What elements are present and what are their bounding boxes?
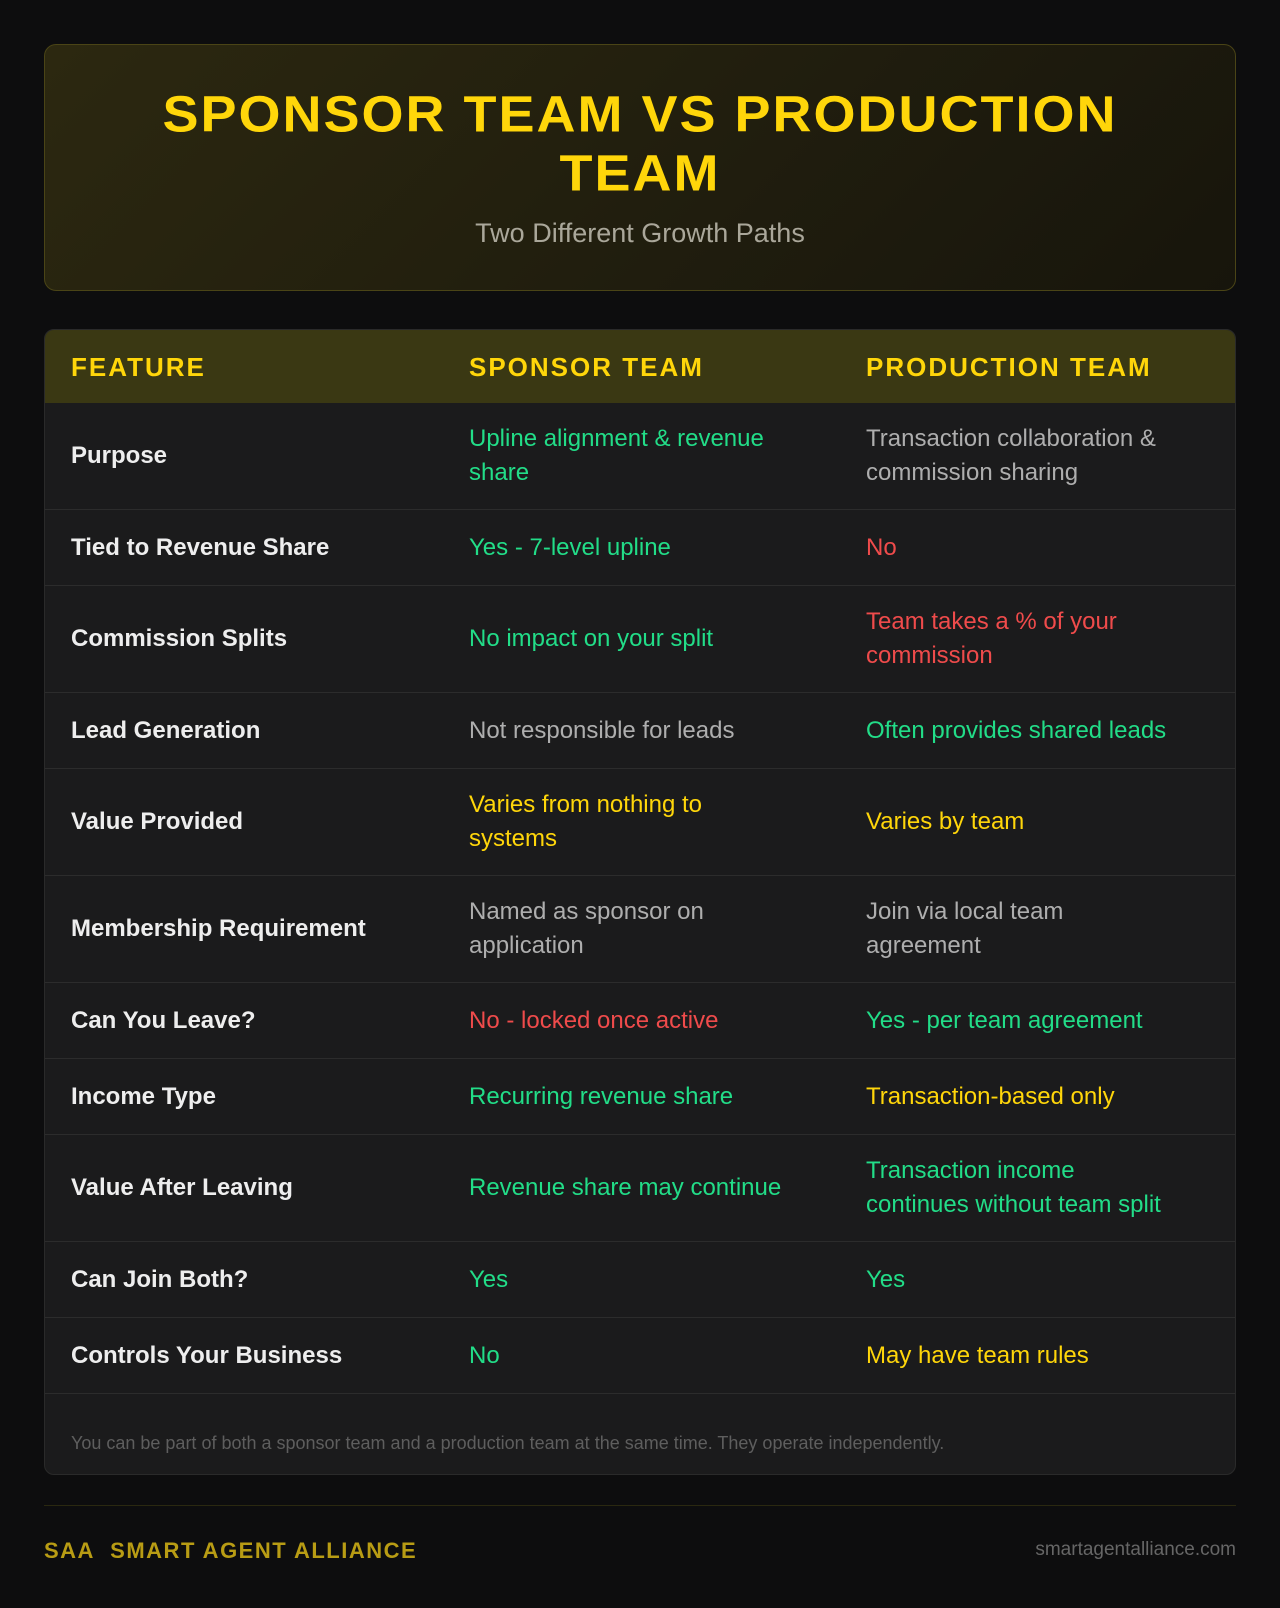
row: value provided [45,769,1235,876]
row: income type [45,1059,1235,1135]
row: revenue share: No [866,534,897,560]
row: membership: Join via local team [866,898,1063,925]
row: lead generation: Lead Generation [71,716,260,744]
row: value provided: Value Provided [71,808,243,835]
footer brand: SAA SMART AGENT ALLIANCE [44,1538,417,1563]
row: commission splits [45,586,1235,693]
comparison table [44,329,1236,1475]
subtitle: Two Different Growth Paths [475,218,805,248]
row: purpose: Upline alignment & revenue share [469,425,764,486]
row: revenue share [45,510,1235,586]
row: leave: No - locked once active [469,1006,718,1034]
row: membership: application [469,932,584,959]
row: purpose: Transaction collaboration & commission sharing [866,425,1156,486]
row: value after leaving: Transaction income [866,1157,1075,1184]
table header row: FEATURE [71,352,206,382]
row: income type: Recurring revenue share [469,1082,733,1110]
row: join both: Yes [469,1266,508,1292]
row: join both: Yes [866,1266,905,1292]
row: controls [45,1318,1235,1394]
row: value provided: Varies from nothing to [469,791,702,818]
row: lead generation: Not responsible for leads [469,716,734,744]
row: controls: May have team rules [866,1342,1089,1368]
title: TEAM [560,145,720,202]
row: membership: agreement [866,932,981,959]
footer url: smartagentalliance.com [1035,1539,1236,1560]
row: leave [45,983,1235,1059]
row: income type: Transaction-based only [866,1082,1115,1110]
table header row: PRODUCTION TEAM [866,352,1152,382]
row: membership [45,876,1235,983]
row: revenue share: Yes - 7-level upline [469,534,671,560]
row: income type: Income Type [71,1082,216,1110]
row: membership: Membership Requirement [71,915,366,942]
row: value provided: Varies by team [866,808,1024,835]
row: commission splits: Team takes a % of your commission [866,608,1117,669]
row: lead generation [45,693,1235,769]
row: leave: Yes - per team agreement [866,1006,1143,1034]
table header row [45,330,1235,403]
row: value after leaving: Value After Leaving [71,1174,293,1201]
table header row: SPONSOR TEAM [469,352,704,382]
row: purpose: Purpose [71,442,167,469]
footnote: You can be part of both a sponsor team and a production team at the same time. They operate independently. [71,1433,944,1453]
header panel [44,44,1236,291]
row: purpose [45,403,1235,510]
row: controls: Controls Your Business [71,1342,342,1368]
row: membership: Named as sponsor on [469,898,704,925]
row: revenue share: Tied to Revenue Share [71,534,329,560]
row: leave: Can You Leave? [71,1006,256,1034]
row: commission splits: Commission Splits [71,625,287,652]
row: value provided: systems [469,825,557,852]
row: controls: No [469,1342,500,1368]
row: lead generation: Often provides shared leads [866,716,1166,744]
row: value after leaving: Revenue share may continue [469,1174,781,1201]
row: join both [45,1242,1235,1318]
row: value after leaving: continues without team split [866,1191,1161,1218]
title: SPONSOR TEAM VS PRODUCTION [162,86,1118,143]
title [162,86,1118,202]
row: value after leaving [45,1135,1235,1242]
row: commission splits: No impact on your split [469,625,713,652]
row: join both: Can Join Both? [71,1266,248,1292]
